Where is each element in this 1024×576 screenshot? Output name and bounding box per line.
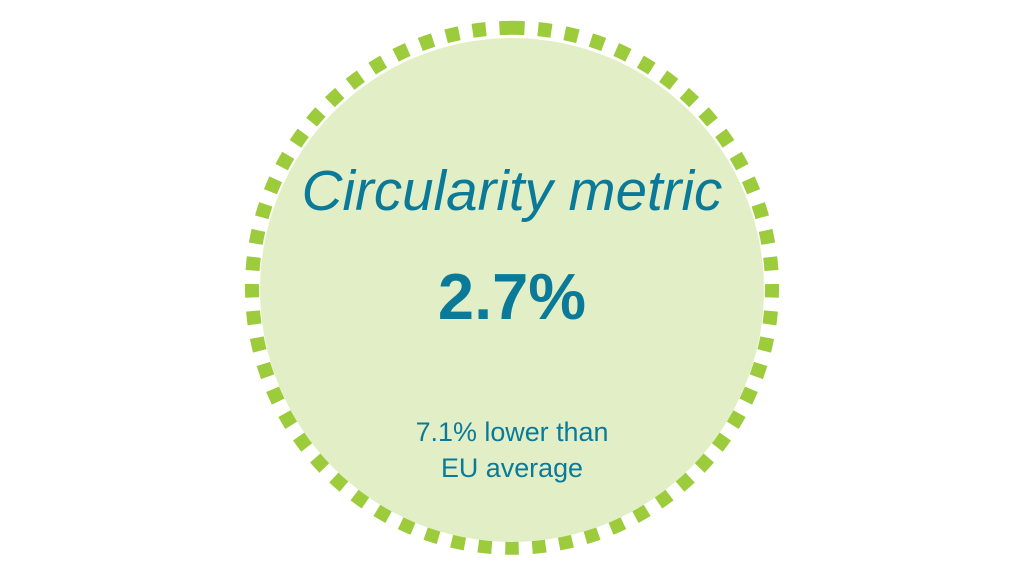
comparison note: 7.1% lower than bbox=[416, 417, 608, 447]
dashed green ring bbox=[252, 28, 772, 548]
comparison note: EU average bbox=[441, 453, 583, 483]
comparison note bbox=[416, 417, 608, 483]
light green circle panel bbox=[260, 38, 764, 542]
main value: 2.7%: 2.7% bbox=[438, 260, 586, 333]
heading: Circularity metric: Circularity metric bbox=[302, 159, 722, 222]
